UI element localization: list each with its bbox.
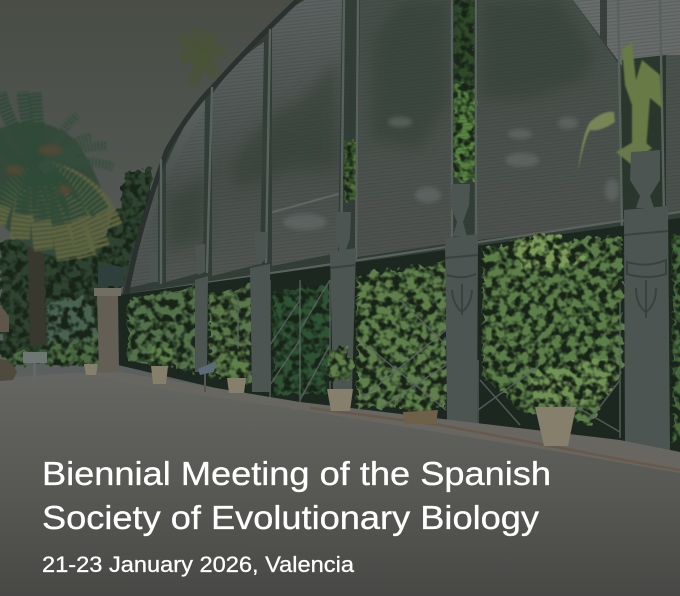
lower trellis [238, 280, 620, 438]
pillar ornaments [330, 231, 668, 318]
flower pots [84, 364, 576, 446]
palm tree [0, 92, 113, 345]
mesh panels [128, 0, 680, 288]
info signs and rock [0, 305, 216, 392]
pot plants [147, 344, 436, 412]
greenhouse frame [118, 0, 680, 358]
title [42, 455, 551, 536]
title: Biennial Meeting of the Spanish [42, 455, 551, 492]
dark bay by plant [622, 55, 666, 225]
pillars with urns [150, 150, 670, 451]
stone gate pillar [94, 265, 124, 372]
date and location: 21-23 January 2026, Valencia [42, 552, 355, 577]
upper plant by urn [578, 42, 662, 172]
greenhouse back layer [122, 0, 680, 300]
sky through far roof [573, 0, 680, 66]
sky [0, 0, 680, 400]
lower dark wall [118, 218, 680, 455]
small palm top [180, 28, 226, 86]
mesh texture [125, 0, 680, 295]
tree reflections in panels [168, 0, 595, 250]
foliage behind panels [344, 0, 476, 202]
ground and paths [0, 373, 680, 596]
title: Society of Evolutionary Biology [42, 499, 540, 536]
foliage: lower climbers [127, 234, 680, 440]
background trees [0, 168, 152, 366]
panel light patches [283, 117, 619, 230]
sidewalk [78, 372, 680, 473]
